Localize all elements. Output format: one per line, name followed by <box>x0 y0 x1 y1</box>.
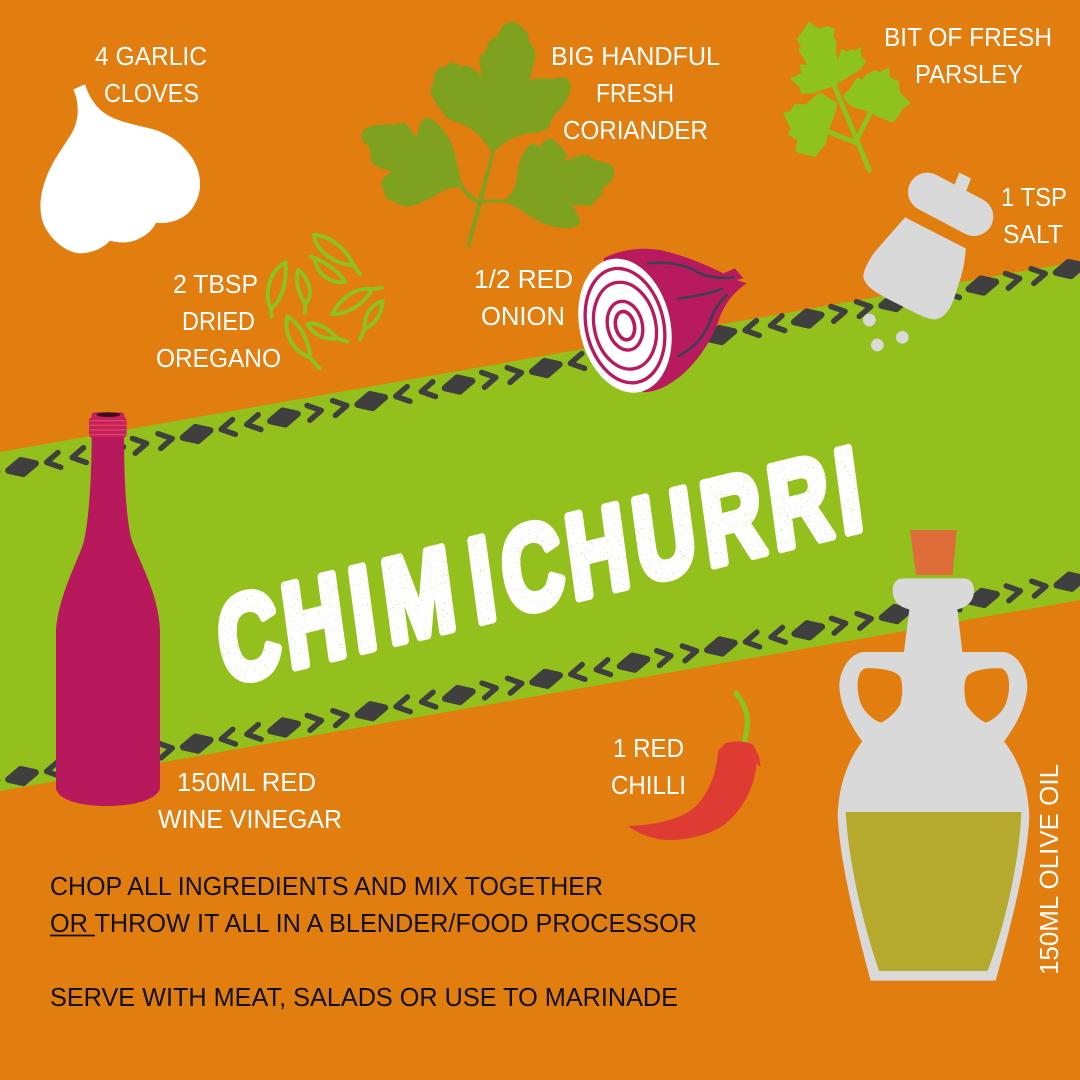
instructions text: SERVE WITH MEAT, SALADS OR USE TO MARINADE <box>50 984 678 1012</box>
label: garlic <box>95 41 207 108</box>
icon: red onion <box>566 249 747 402</box>
label: chilli: 1 RED <box>613 733 684 763</box>
label: onion <box>474 264 573 331</box>
label: onion: 1/2 RED <box>474 264 573 294</box>
label: vinegar <box>158 767 342 834</box>
icon: coriander <box>362 22 614 247</box>
label: salt: 1 TSP <box>1001 182 1067 212</box>
label: oregano: OREGANO <box>156 343 281 373</box>
band pattern: bottom row <box>0 572 1080 802</box>
title: CHIMICHURRI <box>210 422 869 709</box>
instructions text <box>50 873 697 1012</box>
instructions text: OR THROW IT ALL IN A BLENDER/FOOD PROCESSOR <box>50 910 697 938</box>
label: oregano: 2 TBSP <box>173 269 258 299</box>
label: parsley: PARSLEY <box>915 59 1023 89</box>
label: garlic: CLOVES <box>104 78 199 108</box>
label: garlic: 4 GARLIC <box>95 41 207 71</box>
label: onion: ONION <box>481 301 565 331</box>
label: vinegar: 150ML RED <box>177 767 316 797</box>
label: chilli: CHILLI <box>611 770 686 800</box>
green diagonal band <box>0 261 1080 791</box>
label: parsley: BIT OF FRESH <box>884 22 1052 52</box>
icon: parsley <box>784 23 909 170</box>
icon: wine vinegar bottle <box>56 412 160 806</box>
label: oregano <box>156 269 281 373</box>
icon: garlic <box>40 84 200 253</box>
label: coriander: CORIANDER <box>563 115 708 145</box>
label: parsley <box>884 22 1052 89</box>
label: olive oil: 150ML OLIVE OIL <box>1034 764 1064 975</box>
instructions text: CHOP ALL INGREDIENTS AND MIX TOGETHER <box>50 873 603 901</box>
icon: salt shaker <box>863 173 974 351</box>
label: coriander: BIG HANDFUL <box>551 41 720 71</box>
label: coriander <box>551 41 720 145</box>
label: salt: SALT <box>1003 219 1063 249</box>
label: vinegar: WINE VINEGAR <box>158 804 342 834</box>
band pattern: top row <box>0 259 1080 493</box>
icon: olive oil jar <box>838 530 1029 981</box>
label: salt <box>1001 182 1067 249</box>
label: coriander: FRESH <box>596 78 674 108</box>
label: chilli <box>611 733 686 800</box>
icon: oregano leaves <box>268 235 383 368</box>
icon: red chilli <box>628 693 761 840</box>
label: oregano: DRIED <box>182 306 255 336</box>
